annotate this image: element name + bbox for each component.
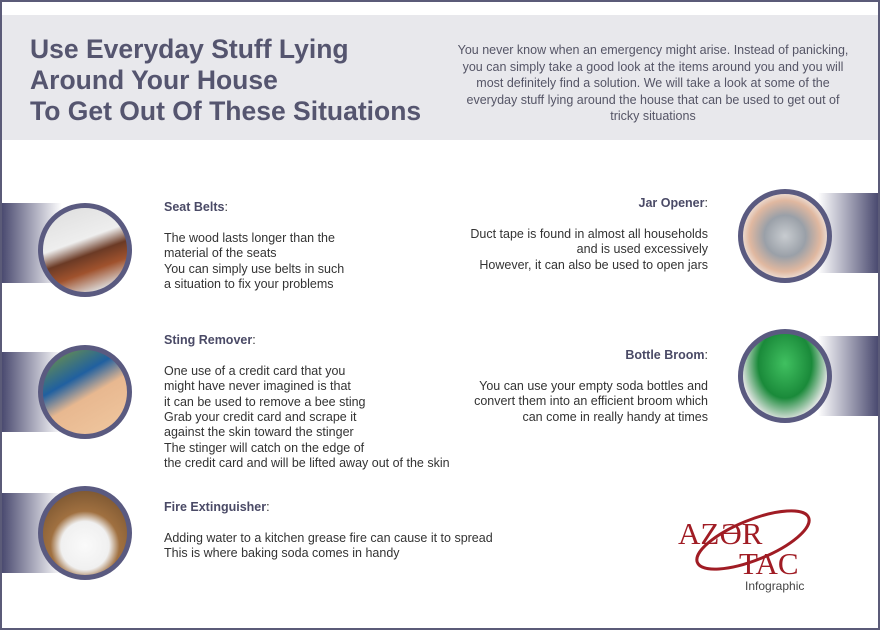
logo: TAC [739, 546, 799, 581]
text: sting remover [164, 333, 450, 470]
text: bottle broom [474, 348, 708, 424]
text: sting remover: against the skin toward the stinger [164, 425, 354, 439]
text: seat belts: You can simply use belts in such [164, 262, 344, 276]
icon: bottle broom [738, 329, 832, 423]
text: fire extinguisher: Fire Extinguisher: [164, 500, 270, 514]
header band [2, 15, 878, 140]
stripe left 3 [2, 493, 62, 573]
text: jar opener [470, 196, 708, 272]
text: fire extinguisher: Adding water to a kitchen grease fire can cause it to spread [164, 531, 493, 545]
icon: credit card [38, 345, 132, 439]
text: sting remover: One use of a credit card that you [164, 364, 345, 378]
text: jar opener: and is used excessively [577, 242, 708, 256]
icon: jar opener [738, 189, 832, 283]
title [30, 34, 421, 126]
text: seat belts: a situation to fix your problems [164, 277, 334, 291]
text: fire extinguisher [164, 500, 493, 560]
text: seat belts: material of the seats [164, 246, 277, 260]
stripe left 2 [2, 352, 62, 432]
intro text: You never know when an emergency might arise. Instead of panicking, you can simply take a good look at the items around you and you will most definitely find a solution. We will take a look at some of the everyday stuff lying around the house that can be used to get out of tricky situations [458, 43, 848, 123]
text: jar opener: Jar Opener: [638, 196, 708, 210]
text: seat belts: The wood lasts longer than the [164, 231, 335, 245]
text: bottle broom: convert them into an efficient broom which [474, 394, 708, 408]
text: jar opener: However, it can also be used to open jars [479, 258, 708, 272]
text: fire extinguisher: This is where baking soda comes in handy [164, 546, 400, 560]
icon: chair [38, 203, 132, 297]
title: Around Your House [30, 65, 278, 95]
text: sting remover: Grab your credit card and scrape it [164, 410, 356, 424]
title: Use Everyday Stuff Lying [30, 34, 349, 64]
stripe left 1 [2, 203, 62, 283]
text: sting remover: the credit card and will be lifted away out of the skin [164, 456, 450, 470]
logo [678, 509, 811, 593]
text: sting remover: Sting Remover: [164, 333, 256, 347]
text: bottle broom: Bottle Broom: [625, 348, 708, 362]
logo: AZƏR [678, 516, 763, 551]
text: seat belts [164, 200, 344, 291]
logo: Infographic [745, 579, 804, 593]
text: sting remover: might have never imagined is that [164, 379, 351, 393]
text: jar opener: Duct tape is found in almost all households [470, 227, 708, 241]
stripe right 2 [818, 336, 878, 416]
icon: baking soda [38, 486, 132, 580]
text: bottle broom: You can use your empty soda bottles and [479, 379, 708, 393]
text: bottle broom: can come in really handy at times [522, 410, 708, 424]
text: sting remover: The stinger will catch on the edge of [164, 441, 364, 455]
text: sting remover: it can be used to remove a bee sting [164, 395, 366, 409]
stripe right 1 [818, 193, 878, 273]
text: seat belts: Seat Belts: [164, 200, 228, 214]
title: To Get Out Of These Situations [30, 96, 421, 126]
